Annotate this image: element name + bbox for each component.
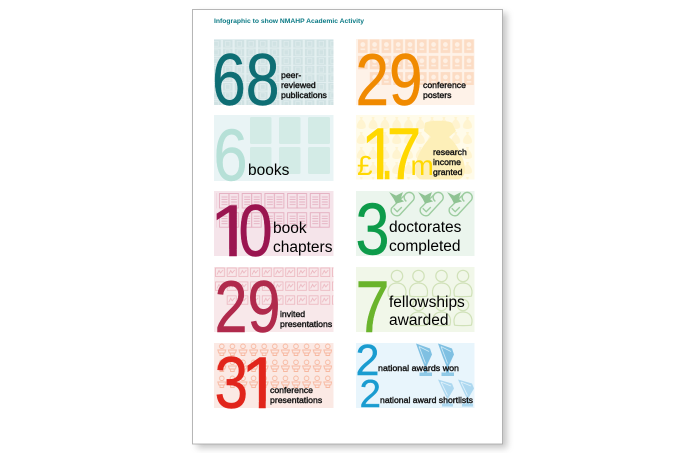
- label: research income: research: [433, 147, 467, 157]
- number: 2 won: 2: [356, 336, 380, 385]
- number: 31: [216, 356, 266, 409]
- panel: books: [214, 115, 334, 196]
- label: publications: publications: [281, 90, 328, 100]
- number: 2 shortlists: 2: [360, 373, 381, 416]
- number: pounds 1.7m: 7: [387, 114, 421, 195]
- label: book chapters: chapters: [273, 239, 333, 256]
- number: pounds 1.7m: m: [410, 150, 434, 181]
- icon row: awards won: [416, 344, 454, 376]
- label: conference presentations: conference: [270, 385, 313, 395]
- label: awards won: national awards won: [378, 363, 459, 373]
- panel: book chapters: [214, 191, 334, 257]
- number: 68: 68: [212, 40, 280, 121]
- panel: fellowships: [356, 267, 474, 348]
- icon grid: books: [250, 117, 330, 174]
- page sheet with shadow: [192, 10, 507, 448]
- label: doctorates: completed: [389, 238, 461, 255]
- label: posters: posters: [423, 90, 452, 100]
- number: 29: 29: [356, 40, 422, 121]
- label: award shortlists: national award shortlists: [380, 395, 474, 405]
- icon grid: open books: [216, 192, 332, 230]
- number: pounds 1.7m: [358, 128, 432, 180]
- label: invited presentations: invited: [280, 309, 305, 319]
- label: conference presentations: presentations: [270, 395, 323, 405]
- label: book chapters: book: [273, 220, 307, 237]
- icon grid: documents: [214, 39, 334, 105]
- label: invited presentations: presentations: [280, 319, 333, 329]
- icon grid: speakers: [216, 343, 332, 391]
- number: 10: 1: [209, 191, 254, 272]
- label: fellowships: fellowships: [389, 294, 465, 311]
- icon: large money bag: [415, 121, 465, 180]
- number: 29: 29: [214, 267, 280, 348]
- number: 10: 0: [238, 191, 273, 272]
- panel: research income: [356, 115, 474, 180]
- number: 6: 6: [214, 116, 248, 196]
- icon row: scrolls: [389, 192, 472, 216]
- label: research income: granted: [433, 167, 463, 177]
- label: posters: conference: [423, 80, 466, 90]
- number: pounds 1.7m: 1: [361, 113, 397, 195]
- panel: doctorates: [356, 190, 474, 270]
- number: 10: [216, 204, 270, 257]
- label: publications: peer-: [281, 70, 301, 80]
- label: publications: reviewed: [281, 80, 316, 90]
- icon grid: posters: [356, 39, 474, 85]
- label: research income: income: [433, 157, 461, 167]
- panel: conference presentations: [214, 343, 334, 409]
- label: doctorates: doctorates: [389, 219, 462, 236]
- panel: national awards: [356, 336, 474, 416]
- icon grid: money bags: [356, 115, 474, 180]
- number: 31: 1: [241, 343, 281, 424]
- panel: invited presentations: [214, 267, 334, 348]
- number: 31: 3: [214, 343, 248, 424]
- label: fellowships: awarded: [389, 312, 448, 329]
- label: books: books: [248, 162, 290, 179]
- number: pounds 1.7m: .: [381, 113, 393, 195]
- icon grid: slides: [214, 267, 334, 306]
- number: pounds 1.7m: £: [357, 150, 373, 181]
- icon row: award shortlists: [438, 380, 474, 406]
- number: 7: 7: [356, 267, 390, 348]
- number: 3: 3: [356, 190, 390, 270]
- title: Infographic to show NMAHP Academic Activity: [214, 18, 364, 25]
- panel: conference posters: [356, 39, 474, 121]
- panel: publications: [212, 39, 334, 121]
- icon grid: people: [388, 270, 472, 326]
